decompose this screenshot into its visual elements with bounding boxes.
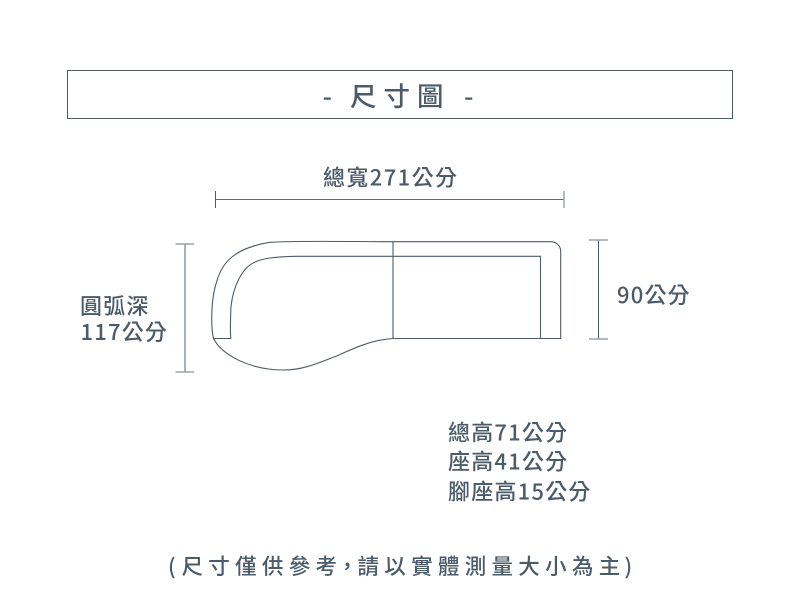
height specs: 腳座高15公分 <box>448 474 591 506</box>
title: 尺寸圖 <box>350 75 450 114</box>
height specs: 座高41公分 <box>448 444 568 476</box>
height specs: 總高71公分 <box>448 416 568 448</box>
arc depth label <box>80 289 168 347</box>
height label: 90公分 <box>617 278 691 310</box>
height specs <box>448 416 591 506</box>
title box <box>68 70 732 118</box>
arc depth label: 圓弧深 <box>80 289 150 321</box>
height dimension line <box>589 240 608 339</box>
disclaimer note: ， <box>336 550 363 581</box>
outer contour <box>212 241 561 370</box>
disclaimer note: 尺寸僅供參考 <box>182 550 342 581</box>
width label: 總寬271公分 <box>323 160 458 192</box>
arc depth label: 117公分 <box>80 315 168 347</box>
inner contour <box>214 256 540 338</box>
disclaimer note: ( <box>168 550 181 581</box>
title: - <box>464 75 480 114</box>
disclaimer note: 請以實體測量大小為主 <box>358 550 626 581</box>
depth dimension line <box>176 244 194 372</box>
disclaimer note: ) <box>624 550 637 581</box>
seat divider <box>392 242 394 338</box>
title: - <box>322 75 339 114</box>
sofa outline <box>212 241 561 370</box>
width dimension line <box>216 191 564 208</box>
